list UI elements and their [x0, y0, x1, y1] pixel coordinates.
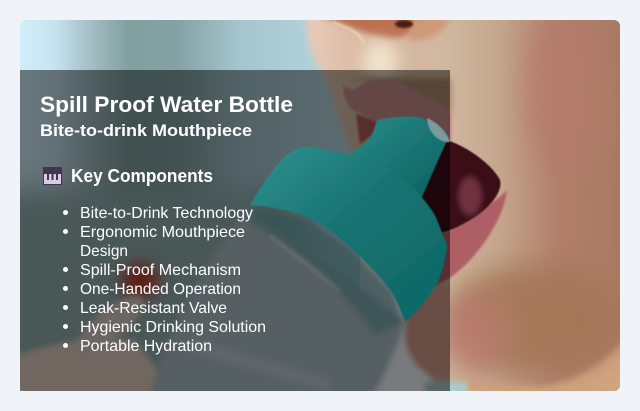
title: Spill Proof Water Bottle [40, 92, 293, 117]
skin highlight [362, 40, 398, 84]
bullet 2 [63, 229, 68, 234]
lower face tan corner [466, 344, 620, 391]
hand at lower left [20, 337, 158, 391]
mouthpiece tip highlight [427, 118, 450, 142]
bullet 5 [63, 305, 68, 310]
item 2: Ergonomic Mouthpiece [80, 224, 245, 241]
red thumb reflection [122, 264, 158, 298]
lower lip [436, 190, 508, 286]
chin shading [445, 265, 625, 375]
bullet 7 [63, 343, 68, 348]
mouthpiece neck [349, 116, 447, 198]
item 2 continued: Design [80, 243, 128, 260]
item 6: Hygienic Drinking Solution [80, 319, 266, 336]
glass teal reflection below cap [250, 207, 402, 335]
nose crease highlight [333, 22, 364, 44]
icon: piano keys [43, 167, 62, 185]
item 3: Spill-Proof Mechanism [80, 262, 241, 279]
bullet 1 [63, 210, 68, 215]
item 5: Leak-Resistant Valve [80, 300, 227, 317]
list of key components [63, 205, 266, 355]
item 4: One-Handed Operation [80, 281, 241, 298]
upper lip [343, 80, 452, 142]
glass highlight lower [190, 345, 330, 385]
bottle cap [250, 147, 447, 322]
nose wing [408, 18, 450, 40]
finger behind bottle [402, 288, 450, 377]
bullet 3 [63, 267, 68, 272]
bullet 6 [63, 324, 68, 329]
light thumb [78, 293, 145, 341]
mouth interior [422, 140, 502, 233]
face skin [305, 10, 640, 400]
lower background blur [20, 180, 300, 391]
right cheek tone [522, 42, 547, 138]
tongue highlight [458, 176, 482, 216]
cheek blush [450, 302, 508, 380]
sky background [20, 20, 360, 286]
nose tip [323, 20, 424, 41]
teal bottle cap and mouthpiece [250, 117, 450, 322]
item 7: Portable Hydration [80, 338, 212, 355]
brown skin above lip [345, 78, 452, 115]
pale bottom strip [425, 382, 467, 394]
red inner cheek beside mouthpiece [356, 114, 378, 144]
item 1: Bite-to-Drink Technology [80, 205, 253, 222]
section heading: Key Components [71, 166, 213, 186]
glass highlight band [270, 235, 340, 290]
subtitle: Bite-to-drink Mouthpiece [40, 121, 252, 140]
nostril [395, 20, 413, 28]
semi-transparent text panel [20, 70, 450, 391]
bullet 4 [63, 286, 68, 291]
bottle glass [150, 205, 405, 400]
